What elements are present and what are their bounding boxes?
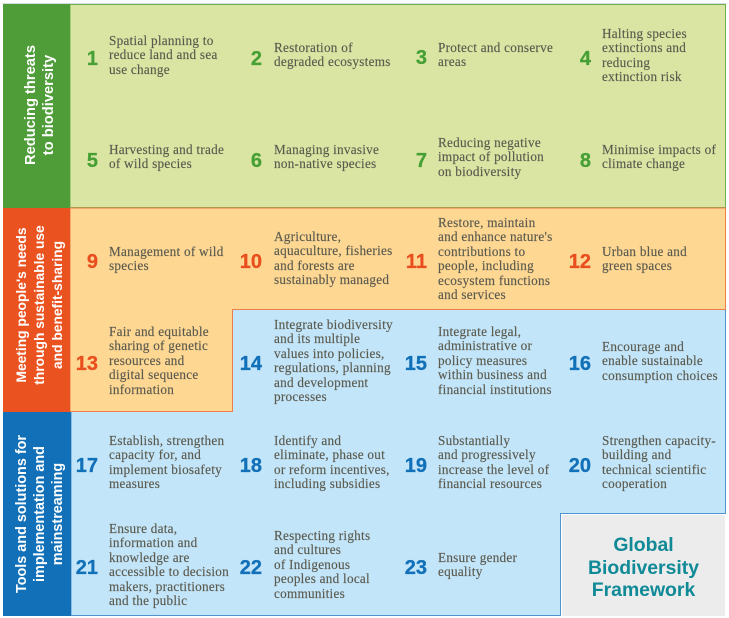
text: 3 [416,47,427,69]
text: non-native species [274,156,376,171]
text: Ensure data, [109,521,177,536]
text: and forests are [274,258,355,273]
sidebar: reducing threats: Reducing threats [23,45,39,165]
text: 17 [76,455,98,477]
text: sharing of genetic [109,338,208,353]
sidebar: tools and solutions: implementation and [32,446,48,582]
text: 23 [405,557,427,579]
text: within business and [438,367,547,382]
text: Identify and [274,433,341,448]
target 8 [580,142,716,172]
text: impact of pollution [438,149,544,164]
text: reducing [602,55,650,70]
text: Spatial planning to [109,33,214,48]
text: financial resources [438,476,542,491]
text: contributions to [438,244,525,259]
sidebar: tools and solutions: mainstreaming [50,463,66,565]
text: processes [274,389,327,404]
text: extinction risk [602,69,682,84]
text: and cultures [274,542,341,557]
text: 4 [580,48,591,70]
target 6 [251,142,379,172]
text: Harvesting and trade [109,142,224,157]
text: 1 [87,48,98,70]
text: 20 [569,455,591,477]
text: reduce land and sea [109,47,218,62]
text: of Indigenous [274,557,350,572]
text: Encourage and [602,339,684,354]
text: Ensure gender [438,550,517,565]
text: people, including [438,258,534,273]
text: Minimise impacts of [602,142,716,157]
text: Restoration of [274,40,353,55]
text: 8 [580,150,591,172]
text: Integrate legal, [438,324,521,339]
target 9 [87,244,224,274]
text: eliminate, phase out [274,447,385,462]
text: and progressively [438,447,536,462]
target 17 [76,433,224,491]
text: 15 [405,353,427,375]
target 18 [240,433,390,492]
text: information [109,382,174,397]
text: 18 [240,455,262,477]
text: 5 [87,150,98,172]
text: information and [109,535,198,550]
text: Agriculture, [274,229,341,244]
target 10 [240,229,392,288]
text: Restore, maintain [438,215,535,230]
text: 6 [251,150,262,172]
text: green spaces [602,258,672,273]
target 12 [569,244,687,274]
text: communities [274,586,345,601]
title: Global Biodiversity Framework [588,534,699,601]
text: cooperation [602,476,667,491]
text: ecosystem functions [438,273,550,288]
target 15 [405,324,552,397]
text: degraded ecosystems [274,54,391,69]
text: 9 [87,251,98,273]
text: Protect and conserve [438,40,553,55]
text: 10 [240,251,262,273]
target 3 [416,40,553,69]
text: values into policies, [274,346,385,361]
target 13 [76,324,209,397]
title: Global Biodiversity Framework: Framework [592,579,695,601]
text: of wild species [109,156,192,171]
text: digital sequence [109,367,198,382]
text: implement biosafety [109,462,222,477]
text: extinctions and [602,40,686,55]
target 22 [240,528,370,601]
text: regulations, planning [274,360,391,375]
text: and development [274,375,368,390]
text: Reducing negative [438,135,541,150]
text: species [109,258,149,273]
sidebar: meeting people's needs: and benefit-sharing [50,241,64,369]
target 11 [406,215,552,302]
text: 16 [569,353,591,375]
text: Halting species [602,26,687,41]
target 23 [405,550,517,580]
text: 19 [405,455,427,477]
text: 13 [76,353,98,375]
text: building and [602,447,671,462]
target 4 [580,26,687,84]
sidebar: meeting people's needs: through sustainable use [32,225,46,385]
text: 21 [76,557,98,579]
text: and the public [109,593,187,608]
sidebar: tools and solutions: Tools and solutions for [14,435,30,593]
text: administrative or [438,338,532,353]
text: policy measures [438,353,527,368]
text: enable sustainable [602,353,703,368]
sidebar: meeting people's needs [14,225,65,385]
text: capacity for, and [109,447,201,462]
target 16 [569,339,718,384]
text: Fair and equitable [109,324,209,339]
target 1 [87,33,218,78]
text: consumption choices [602,368,718,383]
title: Global Biodiversity Framework: Biodiversity [588,556,699,578]
text: and enhance nature's [438,229,552,244]
text: equality [438,564,483,579]
text: Substantially [438,433,510,448]
text: peoples and local [274,571,370,586]
text: aquaculture, fisheries [274,243,392,258]
sidebar: reducing threats [23,45,57,165]
text: including subsidies [274,476,380,491]
text: 14 [240,353,262,375]
text: 22 [240,557,262,579]
text: on biodiversity [438,164,521,179]
text: 11 [406,251,427,273]
text: Management of wild [109,244,224,259]
text: technical scientific [602,462,706,477]
title: Global Biodiversity Framework: Global [613,534,674,556]
text: and its multiple [274,331,360,346]
target 20 [569,433,716,492]
text: Urban blue and [602,244,687,259]
target 5 [87,142,224,172]
sidebar: meeting people's needs: Meeting people's needs [14,227,28,383]
text: or reform incentives, [274,462,390,477]
text: climate change [602,156,685,171]
text: Integrate biodiversity [274,317,393,332]
text: measures [109,476,160,491]
text: Strengthen capacity- [602,433,716,448]
text: and services [438,287,506,302]
target 21 [76,521,229,608]
text: knowledge are [109,550,190,565]
text: resources and [109,353,185,368]
text: makers, practitioners [109,579,225,594]
text: Managing invasive [274,142,379,157]
text: accessible to decision [109,564,229,579]
text: Establish, strengthen [109,433,224,448]
target 19 [405,433,550,491]
text: 2 [251,48,262,70]
text: 7 [416,150,427,172]
target 7 [416,135,544,180]
text: areas [438,54,466,69]
sidebar: tools and solutions [14,435,66,593]
text: Respecting rights [274,528,370,543]
text: sustainably managed [274,272,389,287]
sidebar: reducing threats: to biodiversity [41,55,57,155]
text: use change [109,62,170,77]
text: 12 [569,251,591,273]
text: financial institutions [438,382,552,397]
text: increase the level of [438,462,549,477]
target 2 [251,40,391,70]
target 14 [240,317,393,404]
